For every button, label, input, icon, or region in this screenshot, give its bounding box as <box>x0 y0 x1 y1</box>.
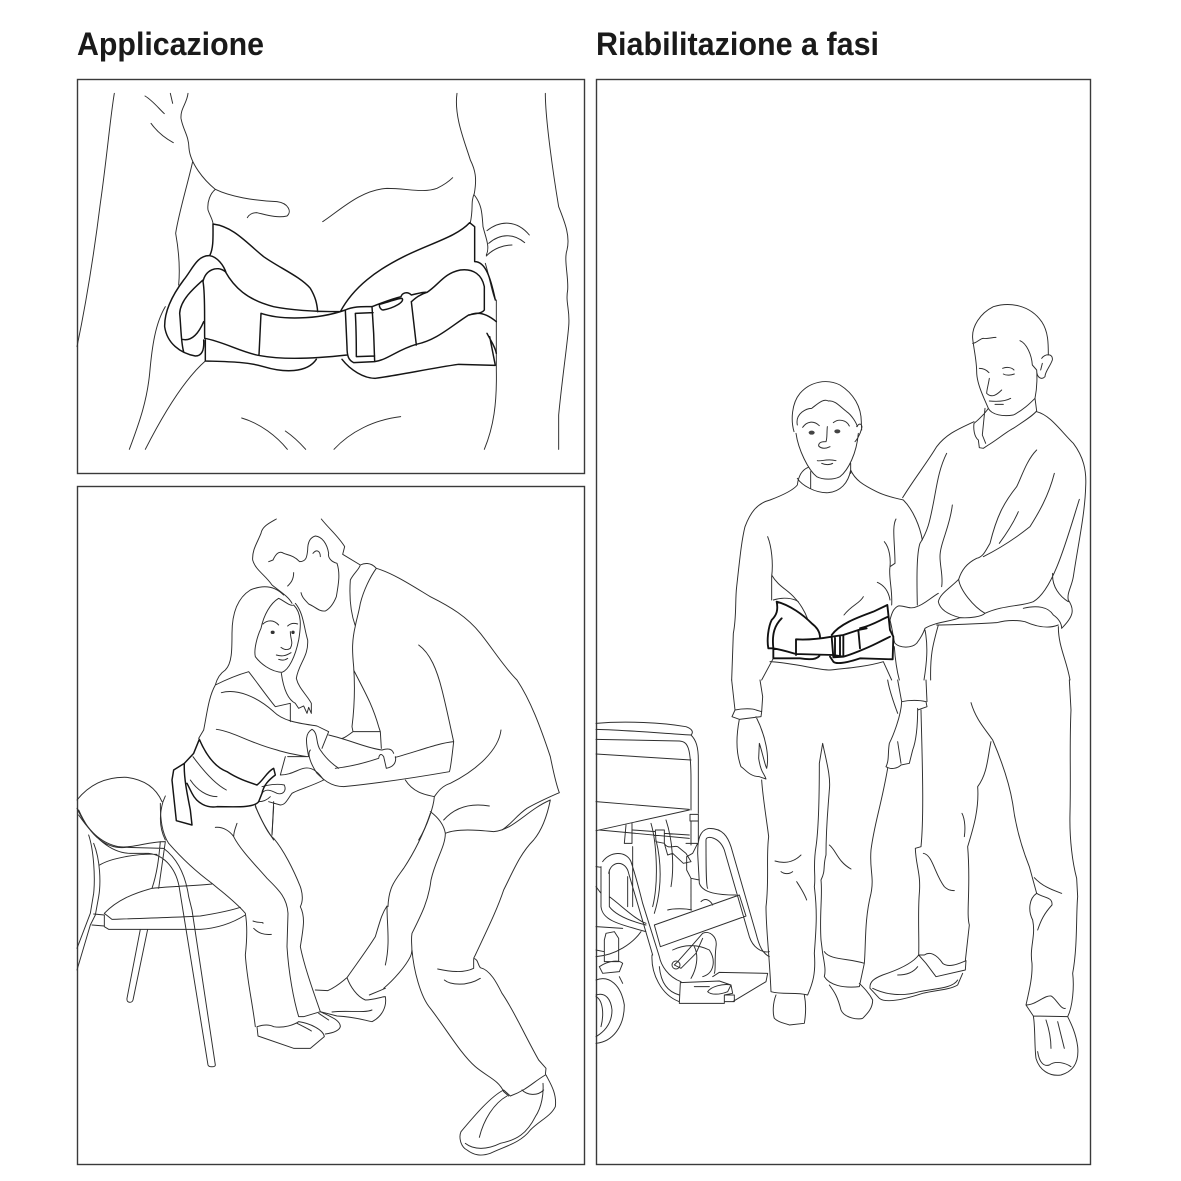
woman legs and hands standing <box>732 680 927 1025</box>
heading: Riabilitazione a fasi: Riabilitazione a fasi <box>596 26 879 62</box>
woman upper body standing <box>732 382 922 680</box>
icon: woman eyes <box>271 631 295 634</box>
body outline close-up <box>77 93 569 449</box>
man upper body <box>253 519 559 840</box>
panel: belt close-up <box>77 80 584 474</box>
icon: woman eyes standing <box>809 429 840 435</box>
man legs and shoes <box>315 800 556 1155</box>
woman legs and feet <box>160 803 340 1048</box>
heading: Applicazione: Applicazione <box>77 26 264 62</box>
woman head and torso <box>77 587 396 840</box>
belt worn by woman <box>172 739 275 825</box>
belt with buckle close-up <box>165 223 496 378</box>
panel: assisted transfer from chair <box>77 486 584 1164</box>
man upper body standing <box>890 305 1086 680</box>
wheelchair axle <box>672 961 680 969</box>
chair <box>77 808 245 1067</box>
panel: walking rehabilitation <box>596 80 1090 1164</box>
belt worn while standing <box>768 602 893 663</box>
man legs and shoes standing <box>870 680 1078 1075</box>
wheelchair <box>596 722 769 1043</box>
